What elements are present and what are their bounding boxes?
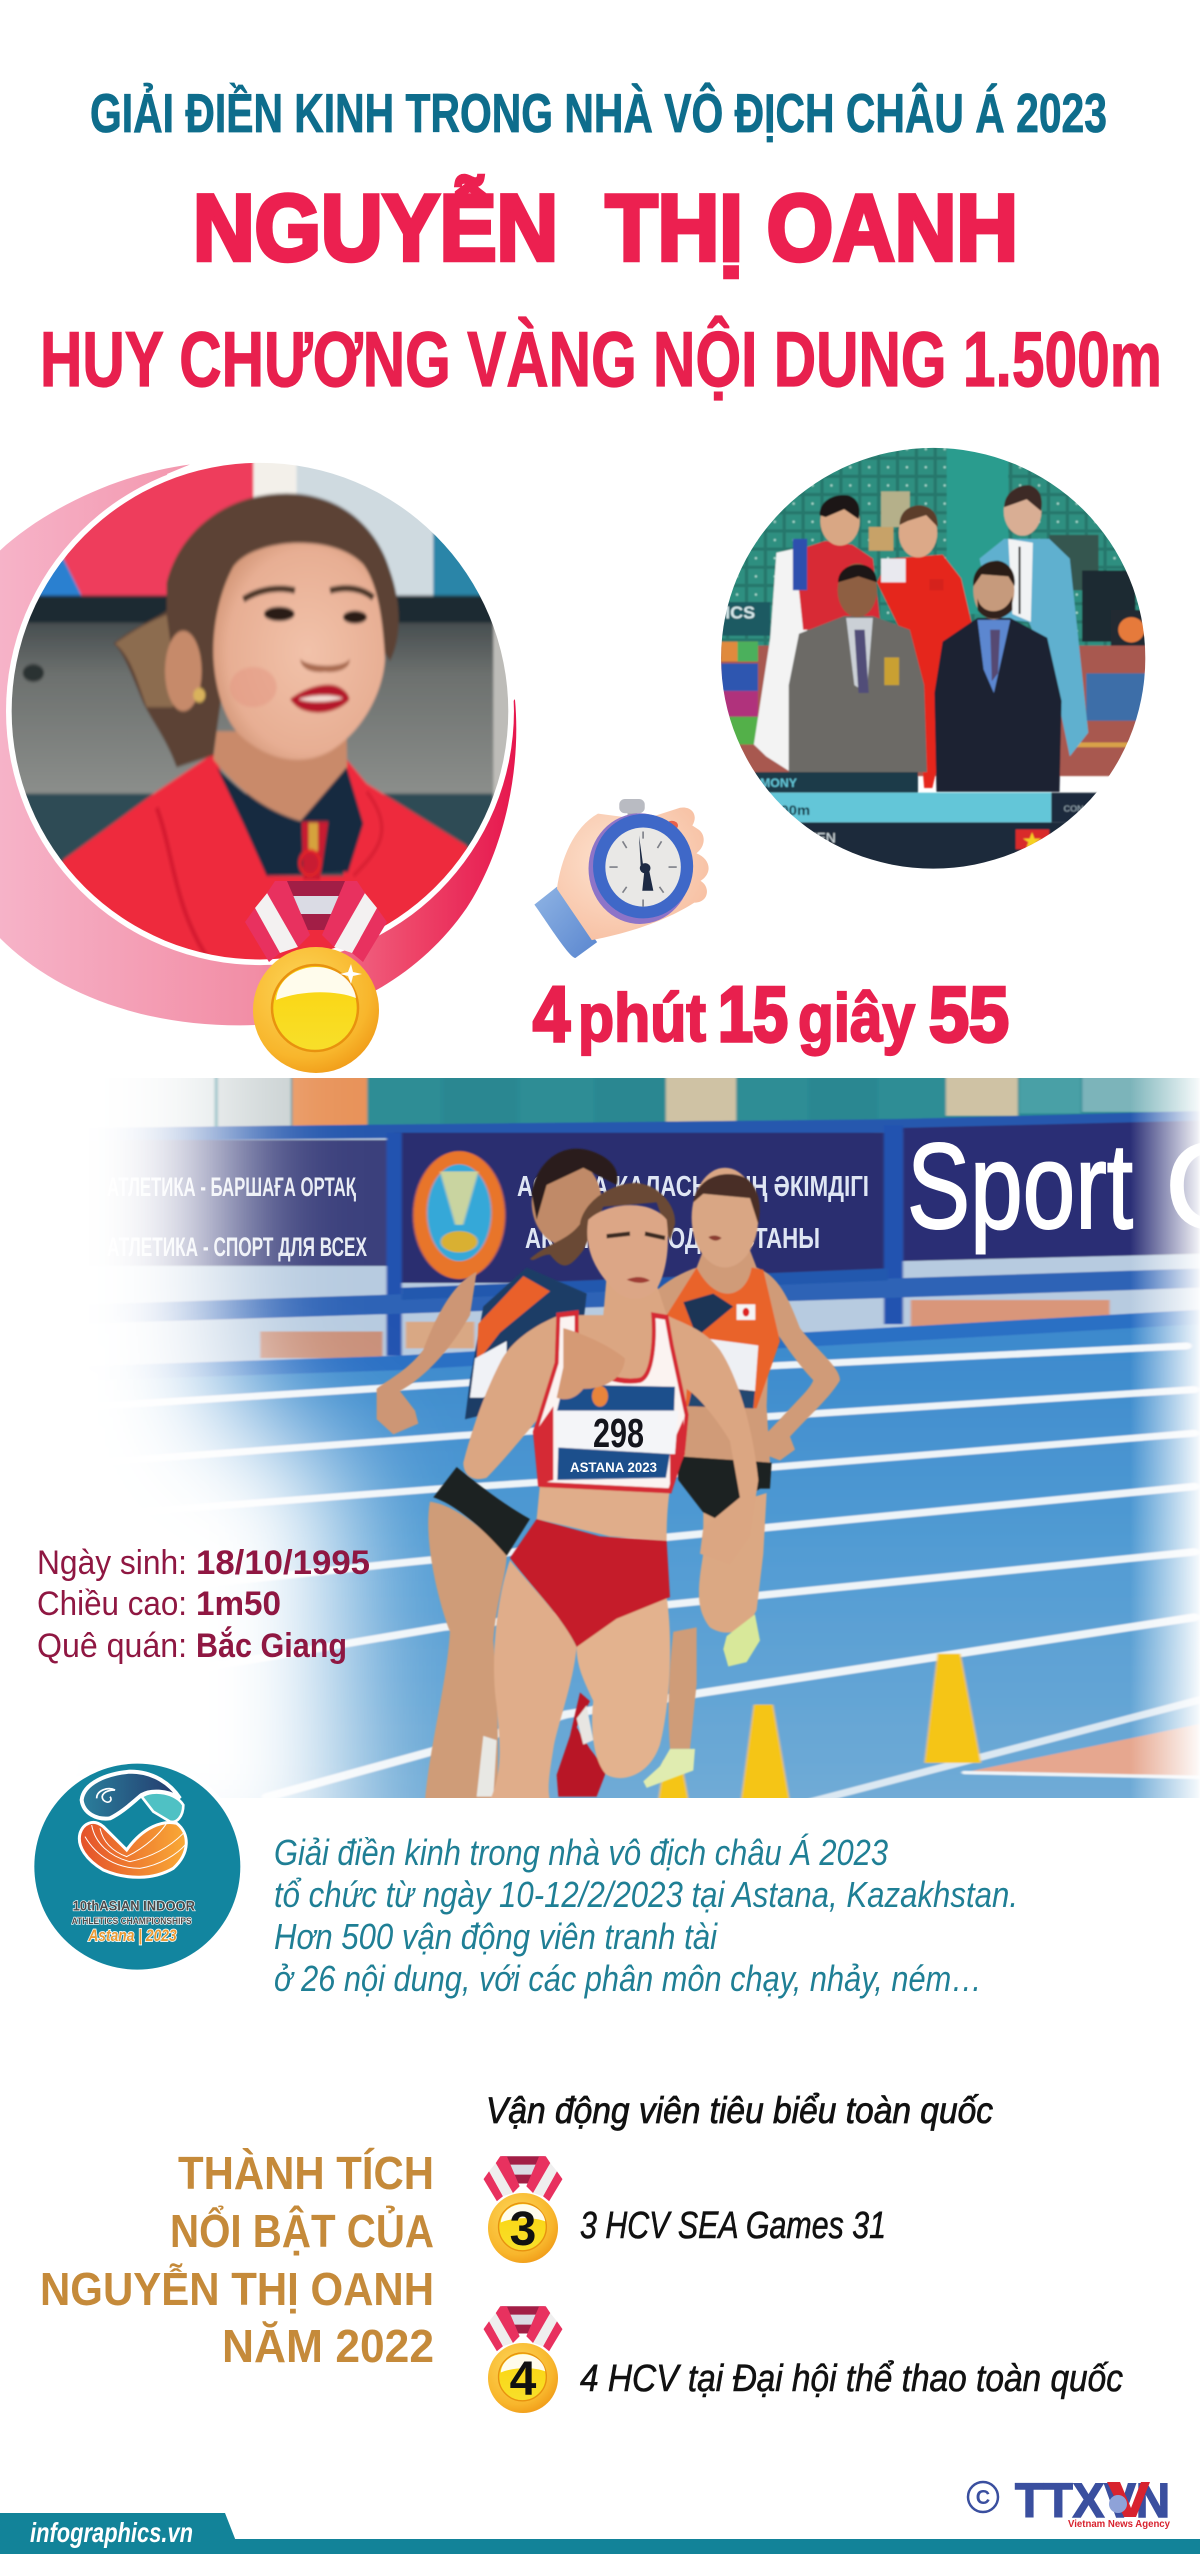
floor and scoreboard blocks [717,646,1152,776]
right official navy suit [934,618,1062,792]
runner main number 298 [463,1183,758,1800]
stand background [717,444,1152,650]
time: minutes label: phút [578,980,706,1056]
championship description [274,1832,1018,1999]
icon: stopwatch in hand [534,799,709,958]
left official grey suit [789,616,927,772]
bib number: 298 [593,1410,644,1456]
footer band [0,2513,1200,2554]
logo: TTXVN copyright: Vietnam News Agency [1068,2519,1170,2530]
championship logo: Astana | 2023 [87,1926,177,1945]
centre athlete [877,555,971,788]
podium photo circle: MONY [760,776,797,790]
height [37,1585,281,1623]
height: 1m50 [196,1585,281,1623]
icon: medal 4: 4 [510,2353,537,2406]
achievements heading [40,2147,434,2372]
hometown [37,1627,347,1665]
arena background [128,1078,1200,1798]
championship logo: ATHLETICS CHAMPIONSHIPS [72,1916,192,1926]
logo: TTXVN copyright: TTXVN [1015,2475,1170,2528]
hometown: Bắc Giang [196,1627,347,1665]
banner text: АТЛЕТИКА - СПОРТ ДЛЯ ВСЕХ [107,1232,367,1262]
emblem [413,1151,505,1279]
birth date: 18/10/1995 [196,1544,370,1582]
runner back left [377,1149,617,1800]
heading: athlete name: NGUYỄN THỊ OANH [193,175,1018,280]
portrait photo [0,450,520,972]
track surface [141,1324,1200,1798]
achievements heading: NỔI BẬT CỦA [170,2205,434,2257]
time: seconds label: giây [798,980,915,1056]
scoreboard graphic bars [717,772,918,793]
banner text [134,1142,1200,1262]
achievements heading: NĂM 2022 [222,2320,434,2372]
portrait panel with crescent [0,450,520,1025]
neck and collar [213,731,347,822]
icon: medal 3 [484,2156,562,2263]
time: minutes value: 4 [533,970,570,1058]
championship description: Giải điền kinh trong nhà vô địch châu Á 2023 [274,1832,888,1873]
banner text: АСТАНА ҚАЛАСЫНЫҢ ӘКІМДІГІ [517,1171,869,1203]
title block [40,82,1162,403]
white fade left [0,900,345,1900]
achievements heading: NGUYỄN THỊ OANH [40,2263,434,2315]
crescent backdrop [0,464,516,1025]
podium photo circle: 500m [772,803,810,819]
icon: medal 3: 3 [510,2203,536,2256]
footer site label: infographics.vn [30,2517,193,2548]
achievement 3 text: 3 HCV SEA Games 31 [580,2205,886,2247]
podium photo circle: ICS [725,603,755,623]
cones [924,1654,981,1763]
podium photo circle: CON [1064,804,1084,814]
left athlete with flag [754,547,807,772]
bib label: ASTANA 2023 [570,1459,657,1475]
salmon floor patch [964,1724,1200,1777]
white fade right [1130,1078,1200,1798]
birth date [37,1544,370,1582]
race time [533,970,1009,1058]
runners [377,1149,840,1800]
achievements heading: THÀNH TÍCH [178,2147,434,2199]
championship description: ở 26 nội dung, với các phân môn chạy, nhảy, ném… [274,1958,982,1999]
height: Chiều cao: [37,1585,187,1623]
face [213,543,385,760]
championship logo: 10thASIAN INDOOR [73,1898,195,1914]
race photo panel [128,1078,1200,1798]
runner back right [643,1168,840,1788]
banner text: АТЛЕТИКА - БАРШАҒА ОРТАҚ [107,1172,356,1202]
jacket [61,753,469,960]
time: seconds value: 15 [718,970,788,1058]
rail and banners [77,1111,1200,1141]
championship logo [29,1759,245,1975]
banner text: АКИМАТ ГОРОДА АСТАНЫ [525,1223,820,1255]
hair [113,493,399,767]
athlete profile [37,1544,370,1665]
icon: gold medal large [245,881,387,1073]
banner text: Sport [907,1118,1133,1254]
lane lines [92,1346,1200,1802]
achievements subtitle: Vận động viên tiêu biểu toàn quốc [486,2090,993,2131]
achievement 4 text: 4 HCV tại Đại hội thể thao toàn quốc [580,2358,1123,2400]
podium photo circle: YEN [807,831,836,845]
championship description: Hơn 500 vận động viên tranh tài [274,1916,718,1957]
icon: medal 4 [484,2306,562,2413]
hometown: Quê quán: [37,1627,187,1665]
logo: TTXVN copyright: C [976,2487,990,2509]
podium photo circle [717,444,1154,872]
championship description: tổ chức từ ngày 10-12/2/2023 tại Astana, Kazakhstan. [274,1874,1018,1915]
white ring [6,457,514,965]
time: hundredths value: 55 [929,970,1009,1058]
birth date: Ngày sinh: [37,1544,187,1582]
right athlete with flag [980,539,1088,756]
